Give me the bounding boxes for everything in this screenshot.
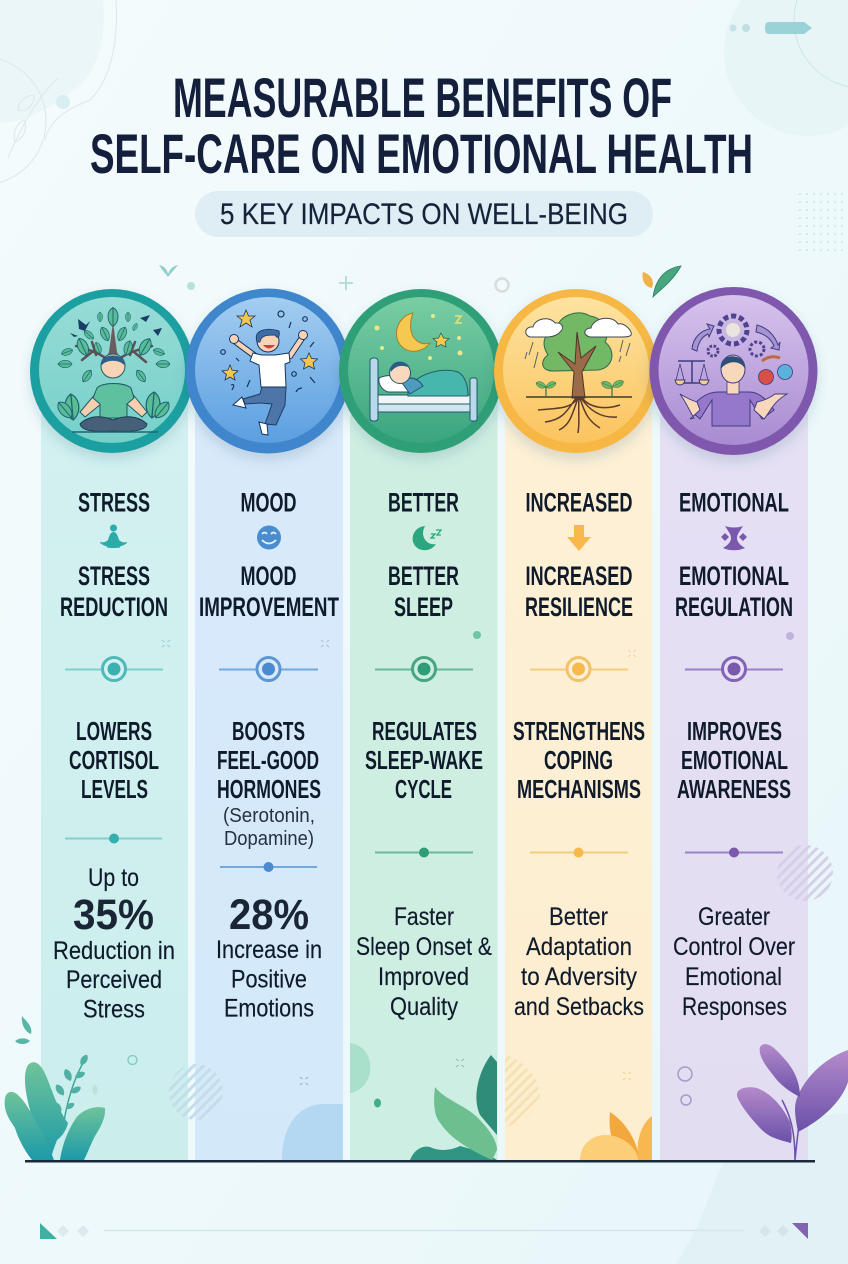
description: LEVELS	[81, 774, 148, 804]
outcome	[673, 903, 795, 1021]
divider with target marker	[530, 658, 628, 680]
title	[90, 66, 753, 185]
footer decoration	[40, 1223, 808, 1239]
panel title	[388, 561, 459, 622]
outcome: Better	[549, 903, 608, 931]
heading: STRESS	[78, 488, 150, 518]
panel: stress reduction	[30, 289, 194, 1160]
description: EMOTIONAL	[681, 745, 788, 775]
icon: balance symbol	[721, 526, 747, 550]
small divider	[530, 848, 628, 858]
description: HORMONES	[217, 774, 321, 804]
panel: mood improvement	[186, 288, 350, 1160]
stat: 28%	[229, 891, 309, 939]
outcome: Emotional	[685, 963, 782, 991]
panel title	[199, 561, 339, 622]
icon: jumping happy person	[186, 288, 350, 454]
outcome: Responses	[682, 993, 787, 1021]
icon: down arrow	[567, 525, 591, 551]
heading: EMOTIONAL	[679, 488, 789, 518]
stat	[53, 864, 175, 1024]
panel title: MOOD	[240, 561, 296, 591]
plant: purple foliage	[737, 1044, 848, 1160]
panel title: STRESS	[78, 561, 150, 591]
heading: BETTER	[388, 488, 459, 518]
small divider	[685, 848, 783, 858]
divider with target marker	[685, 658, 783, 680]
icon: tree with deep roots in a storm	[494, 289, 658, 453]
heading: INCREASED	[526, 488, 632, 518]
stat	[216, 891, 322, 1022]
outcome: Greater	[698, 903, 770, 931]
outcome: Control Over	[673, 933, 795, 961]
panel title	[60, 561, 168, 622]
icon: person balancing gears, scales and moods	[650, 287, 818, 455]
panel title: INCREASED	[526, 561, 632, 591]
outcome	[356, 903, 492, 1021]
panel: better sleep	[339, 289, 503, 1160]
description	[677, 716, 791, 804]
description	[513, 716, 645, 804]
panel title	[675, 561, 793, 622]
description: LOWERS	[76, 716, 152, 746]
panel title: SLEEP	[394, 592, 453, 622]
baseline	[25, 1160, 815, 1162]
small divider	[65, 834, 162, 844]
description: CYCLE	[395, 774, 452, 804]
plant: amber leaves	[505, 1055, 652, 1160]
description: AWARENESS	[677, 774, 791, 804]
outcome: and Setbacks	[514, 993, 644, 1021]
floating accents above the circles	[159, 265, 681, 297]
description	[69, 716, 159, 804]
description	[217, 716, 321, 850]
heading: MOOD	[240, 488, 296, 518]
panel title: REDUCTION	[60, 592, 168, 622]
plant: green leaves	[350, 1043, 497, 1160]
outcome	[514, 903, 644, 1021]
column background	[350, 370, 498, 1160]
stat: Increase in	[216, 936, 322, 964]
outcome: Faster	[394, 903, 454, 931]
description: BOOSTS	[232, 716, 305, 746]
stat: Emotions	[224, 994, 314, 1022]
outcome: Sleep Onset &	[356, 933, 492, 961]
outcome: Improved	[378, 963, 469, 991]
divider with target marker	[219, 658, 318, 680]
icon: meditating person under a tree	[30, 289, 194, 453]
plant: blue blob	[282, 1104, 343, 1160]
description: CORTISOL	[69, 745, 159, 775]
subtitle pill	[195, 191, 653, 237]
column background	[505, 370, 652, 1160]
panel title: RESILIENCE	[525, 592, 633, 622]
description: FEEL-GOOD	[217, 745, 319, 775]
description: REGULATES	[372, 716, 477, 746]
outcome: Adaptation	[526, 933, 632, 961]
stat: Positive	[231, 966, 307, 994]
stat: Up to	[88, 864, 139, 892]
stat: Stress	[83, 996, 145, 1024]
stat: 35%	[73, 891, 154, 939]
description: (Serotonin,	[223, 805, 315, 827]
panel title: EMOTIONAL	[679, 561, 789, 591]
description: Dopamine)	[224, 828, 314, 850]
panel title: BETTER	[388, 561, 459, 591]
stat: Reduction in	[53, 937, 175, 965]
icon: smiley	[257, 526, 281, 550]
panel title: IMPROVEMENT	[199, 592, 339, 622]
small divider	[220, 862, 317, 872]
outcome: Quality	[390, 993, 458, 1021]
description	[365, 716, 483, 804]
icon: meditation	[100, 524, 127, 548]
column background	[41, 370, 188, 1160]
panel: increased resilience	[494, 289, 658, 1160]
small divider	[375, 848, 473, 858]
stat: Perceived	[66, 966, 162, 994]
plant: left teal foliage	[5, 1016, 105, 1160]
column background	[195, 370, 343, 1160]
small accents inside the columns	[128, 631, 833, 1120]
panel title: REGULATION	[675, 592, 793, 622]
panel title	[525, 561, 633, 622]
outcome: to Adversity	[521, 963, 637, 991]
icon: moon with zzz	[413, 526, 441, 550]
description: STRENGTHENS	[513, 716, 645, 746]
column background	[660, 370, 808, 1160]
icon: person sleeping under the moon	[339, 289, 503, 453]
description: COPING	[544, 745, 613, 775]
description: MECHANISMS	[517, 774, 641, 804]
description: IMPROVES	[687, 716, 782, 746]
divider with target marker	[375, 658, 473, 680]
subtitle pill: 5 KEY IMPACTS ON WELL-BEING	[220, 198, 628, 231]
divider with target marker	[65, 658, 163, 680]
panel: emotional regulation	[650, 287, 818, 1160]
description: SLEEP-WAKE	[365, 745, 483, 775]
